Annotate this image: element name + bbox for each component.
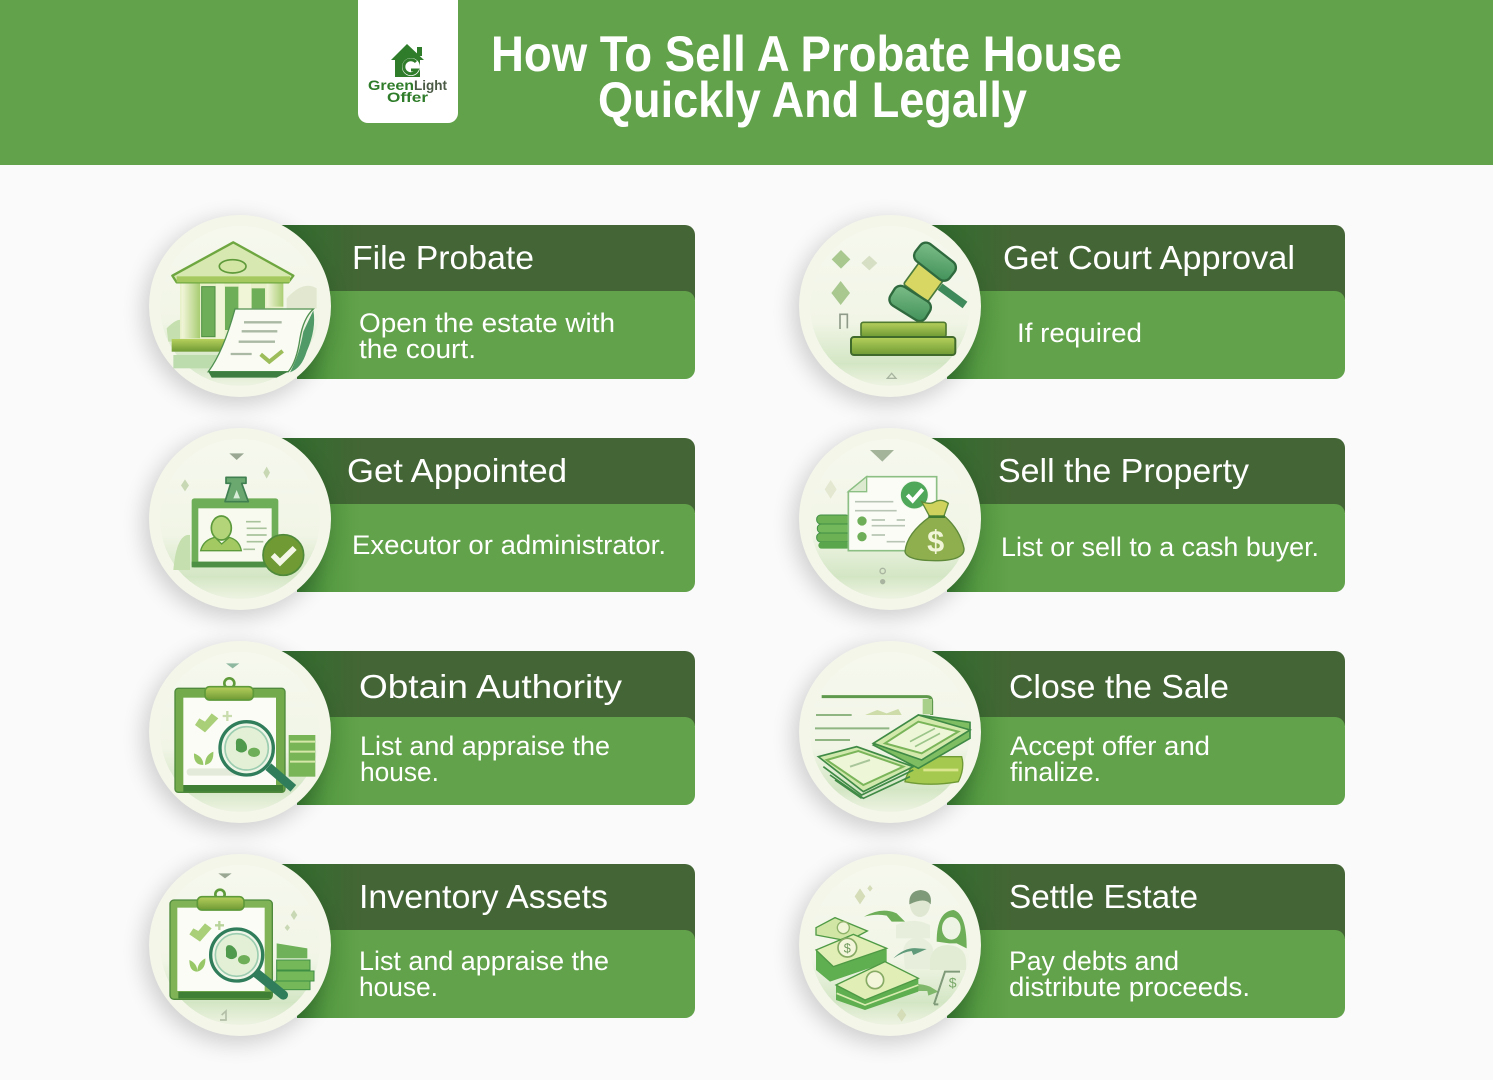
icon: clipboard, magnifier and bills [170, 873, 314, 1020]
description: Open the estate with [359, 308, 615, 338]
description: distribute proceeds. [1009, 972, 1250, 1002]
card: Inventory Assets [143, 854, 695, 1044]
title: Quickly And Legally [598, 72, 1027, 128]
description [359, 308, 615, 364]
icon: gavel [831, 240, 965, 378]
logo: Offer [387, 89, 429, 105]
header band [0, 0, 1493, 165]
card: Obtain Authority [143, 641, 695, 831]
description [1010, 731, 1210, 787]
logo [358, 0, 458, 123]
description: the court. [359, 334, 476, 364]
icon: cash distributed to heirs: $ [844, 941, 851, 955]
icon: cash distributed to heirs [816, 885, 967, 1022]
description: List and appraise the [359, 946, 609, 976]
description [1009, 946, 1250, 1002]
title: How To Sell A Probate House [491, 26, 1122, 82]
icon: document and money bag [817, 450, 964, 584]
card: File Probate [143, 215, 695, 405]
description: house. [360, 757, 439, 787]
description: List and appraise the [360, 731, 610, 761]
description [359, 946, 609, 1002]
logo: Light [414, 77, 447, 93]
icon: stacks of cash on paperwork [815, 697, 970, 798]
heading: Settle Estate [1009, 878, 1198, 915]
card: Get Appointed [143, 428, 695, 618]
description: Accept offer and [1010, 731, 1210, 761]
heading: Inventory Assets [359, 878, 608, 915]
description: finalize. [1010, 757, 1101, 787]
icon: ID badge with check [173, 453, 304, 575]
heading: Sell the Property [998, 452, 1250, 489]
logo: Green [368, 77, 414, 93]
description: house. [359, 972, 438, 1002]
heading: Close the Sale [1009, 668, 1229, 705]
heading: Get Appointed [347, 452, 567, 489]
icon: cash distributed to heirs: $ [949, 975, 957, 991]
description [360, 731, 610, 787]
description: Pay debts and [1009, 946, 1179, 976]
card: Get Court Approval [793, 215, 1345, 405]
description: List or sell to a cash buyer. [1001, 532, 1319, 562]
card: Close the Sale [793, 641, 1345, 831]
card: Sell the Property [793, 428, 1345, 618]
icon: clipboard with magnifier [175, 663, 315, 792]
card: Settle Estate [793, 854, 1345, 1044]
icon: document and money bag: $ [927, 525, 944, 559]
description: If required [1017, 318, 1142, 348]
heading: Get Court Approval [1003, 239, 1295, 276]
description: Executor or administrator. [352, 530, 666, 560]
heading: File Probate [352, 239, 534, 276]
icon: courthouse and document [167, 242, 317, 378]
heading: Obtain Authority [359, 668, 623, 705]
title [491, 26, 1122, 128]
